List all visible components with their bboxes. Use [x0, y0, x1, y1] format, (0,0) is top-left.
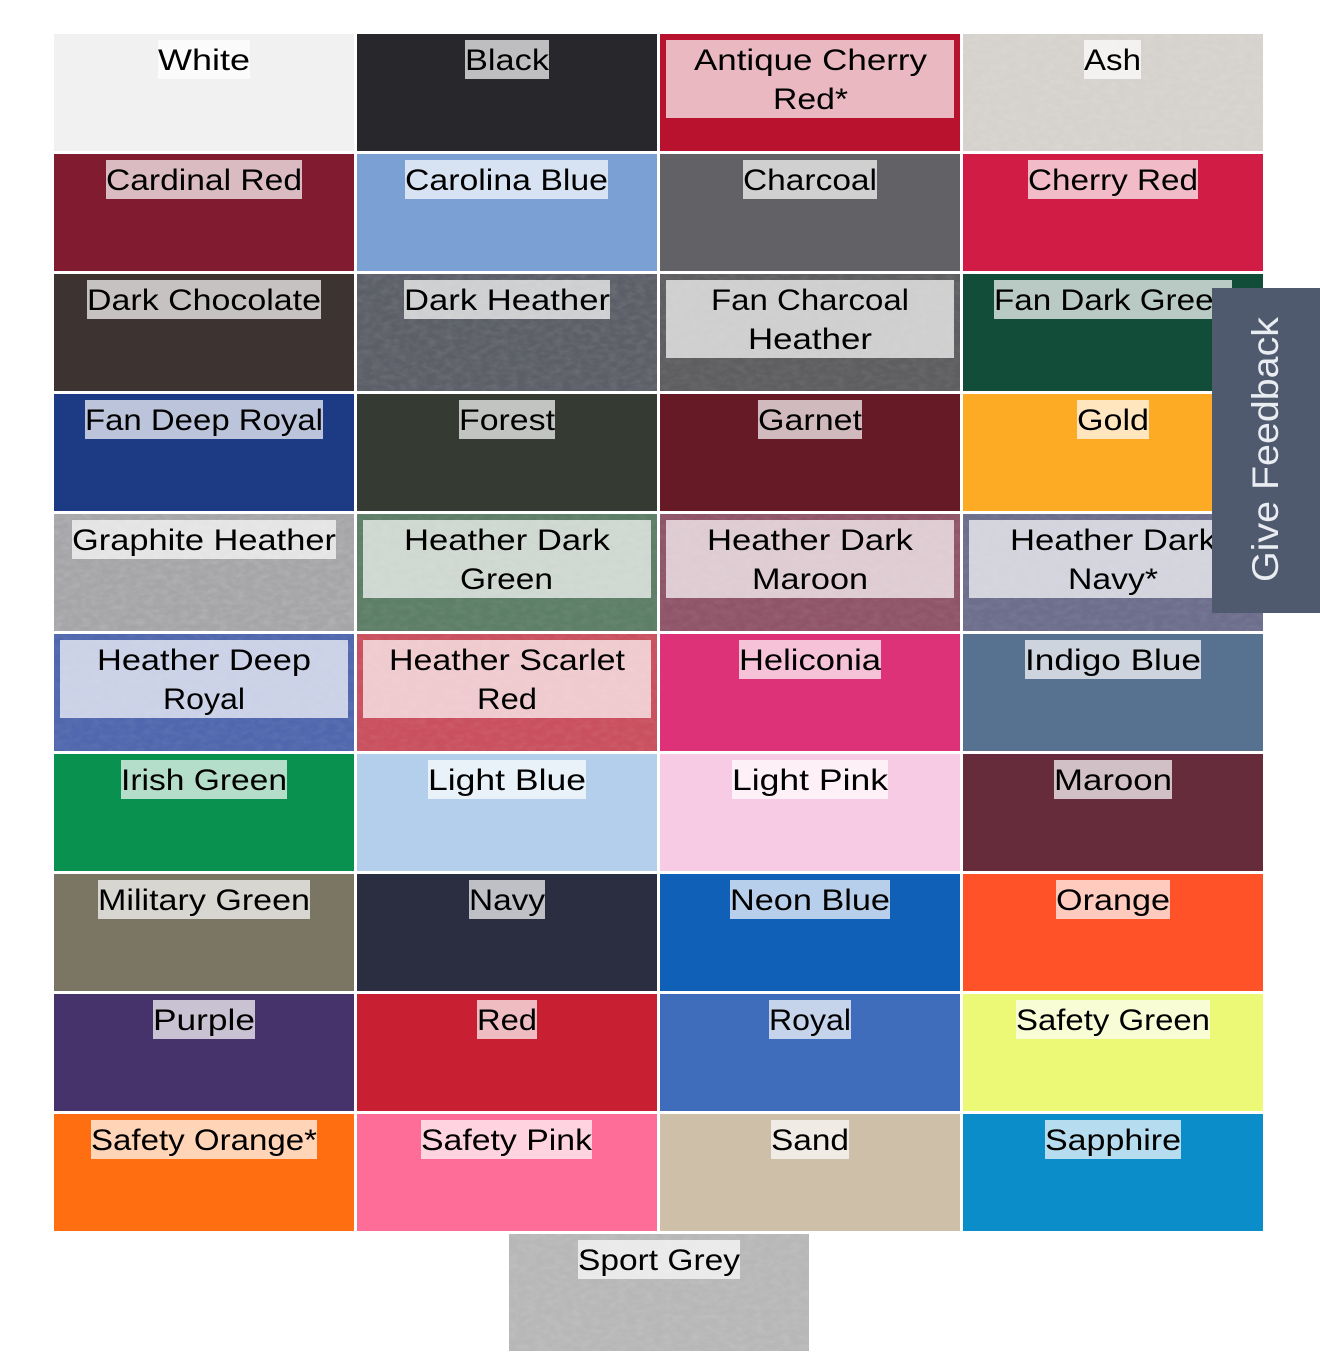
- swatch: Gold: [963, 394, 1263, 511]
- swatch: Garnet: [660, 394, 960, 511]
- swatch: Cardinal Red: Cardinal Red: [106, 164, 302, 197]
- swatch: Heather Scarlet Red: Red: [477, 683, 537, 716]
- swatch: Carolina Blue: [357, 154, 657, 271]
- swatch: Forest: [357, 394, 657, 511]
- swatch: Heather Scarlet Red: Heather Scarlet: [389, 644, 626, 677]
- swatch: Sapphire: [963, 1114, 1263, 1231]
- swatch: Light Pink: [660, 754, 960, 871]
- swatch: Heather Deep Royal: Royal: [163, 683, 245, 716]
- swatch: Heather Dark Maroon: [660, 514, 960, 631]
- swatch: Antique Cherry Red: [660, 34, 960, 151]
- swatch: Sand: [660, 1114, 960, 1231]
- swatch: White: White: [158, 44, 250, 77]
- swatch: Fan Dark Green: [963, 274, 1263, 391]
- swatch: Heliconia: Heliconia: [739, 644, 881, 677]
- swatch: Neon Blue: Neon Blue: [730, 884, 890, 917]
- swatch: Maroon: Maroon: [1054, 764, 1172, 797]
- swatch: Heather Dark Green: [357, 514, 657, 631]
- swatch: Military Green: [54, 874, 354, 991]
- swatch: Orange: Orange: [1056, 884, 1170, 917]
- swatch: Orange: [963, 874, 1263, 991]
- swatch: Neon Blue: [660, 874, 960, 991]
- swatch: Light Blue: [357, 754, 657, 871]
- swatch: Cardinal Red: [54, 154, 354, 271]
- swatch: Fan Charcoal Heather: Heather: [748, 323, 872, 356]
- swatch: Fan Dark Green: Fan Dark Green: [994, 284, 1232, 317]
- swatch: Navy: [357, 874, 657, 991]
- swatch: Dark Heather: [357, 274, 657, 391]
- swatch: Heather Scarlet Red: [357, 634, 657, 751]
- swatch: Heliconia: [660, 634, 960, 751]
- swatch: White: [54, 34, 354, 151]
- swatch: Indigo Blue: [963, 634, 1263, 751]
- swatch: Heather Deep Royal: Heather Deep: [97, 644, 311, 677]
- swatch: Heather Deep Royal: [54, 634, 354, 751]
- swatch: Light Pink: Light Pink: [732, 764, 889, 797]
- swatch: Safety Orange: Safety Orange*: [91, 1124, 317, 1157]
- swatch: Heather Dark Navy: Heather Dark: [1010, 524, 1217, 557]
- swatch: Safety Pink: Safety Pink: [421, 1124, 593, 1157]
- feedback tab: Give Feedback: [1245, 316, 1286, 582]
- swatch: Safety Pink: [357, 1114, 657, 1231]
- swatch: Heather Dark Navy: Navy*: [1068, 563, 1158, 596]
- swatch: Fan Charcoal Heather: Fan Charcoal: [711, 284, 909, 317]
- swatch: Fan Charcoal Heather: [660, 274, 960, 391]
- swatch: Safety Orange: [54, 1114, 354, 1231]
- swatch: Ash: [963, 34, 1263, 151]
- swatch: Carolina Blue: Carolina Blue: [405, 164, 608, 197]
- swatch: Purple: [54, 994, 354, 1111]
- swatch: Charcoal: Charcoal: [743, 164, 877, 197]
- swatch: Forest: Forest: [459, 404, 556, 437]
- feedback tab: [1212, 288, 1320, 613]
- swatch: Graphite Heather: [54, 514, 354, 631]
- swatch: Red: [357, 994, 657, 1111]
- swatch: Graphite Heather: Graphite Heather: [72, 524, 336, 557]
- swatch: Maroon: [963, 754, 1263, 871]
- swatch: Irish Green: Irish Green: [121, 764, 287, 797]
- swatch: Royal: [660, 994, 960, 1111]
- swatch: Cherry Red: [963, 154, 1263, 271]
- swatch: Fan Deep Royal: Fan Deep Royal: [85, 404, 323, 437]
- swatch: Sport Grey: Sport Grey: [578, 1244, 740, 1277]
- swatch: Heather Dark Maroon: Heather Dark: [707, 524, 914, 557]
- swatch: Dark Chocolate: Dark Chocolate: [87, 284, 321, 317]
- swatch: Cherry Red: Cherry Red: [1028, 164, 1198, 197]
- swatch: Ash: Ash: [1084, 44, 1141, 77]
- swatch: Fan Deep Royal: [54, 394, 354, 511]
- swatch: Dark Chocolate: [54, 274, 354, 391]
- swatch: Sport Grey: [509, 1234, 809, 1351]
- swatch: Gold: Gold: [1077, 404, 1149, 437]
- swatch: Black: Black: [465, 44, 550, 77]
- swatch: Irish Green: [54, 754, 354, 871]
- swatch: Sapphire: Sapphire: [1045, 1124, 1181, 1157]
- swatch: Heather Dark Green: Heather Dark: [404, 524, 611, 557]
- swatch: Heather Dark Navy: [963, 514, 1263, 631]
- swatch: Charcoal: [660, 154, 960, 271]
- swatch: Red: Red: [477, 1004, 537, 1037]
- swatch: Sand: Sand: [771, 1124, 849, 1157]
- swatch: Light Blue: Light Blue: [428, 764, 586, 797]
- swatch: Antique Cherry Red: Antique Cherry: [694, 44, 927, 77]
- swatch: Royal: Royal: [769, 1004, 851, 1037]
- swatch: Antique Cherry Red: Red*: [773, 83, 848, 116]
- swatch: Purple: Purple: [153, 1004, 255, 1037]
- swatch: Indigo Blue: Indigo Blue: [1025, 644, 1201, 677]
- swatch: Black: [357, 34, 657, 151]
- swatch: Safety Green: Safety Green: [1016, 1004, 1210, 1037]
- swatch: Military Green: Military Green: [98, 884, 310, 917]
- swatch: Safety Green: [963, 994, 1263, 1111]
- swatch: Garnet: Garnet: [758, 404, 863, 437]
- swatch: Navy: Navy: [469, 884, 545, 917]
- swatch: Heather Dark Maroon: Maroon: [752, 563, 868, 596]
- swatch: Heather Dark Green: Green: [460, 563, 553, 596]
- swatch: Dark Heather: Dark Heather: [404, 284, 610, 317]
